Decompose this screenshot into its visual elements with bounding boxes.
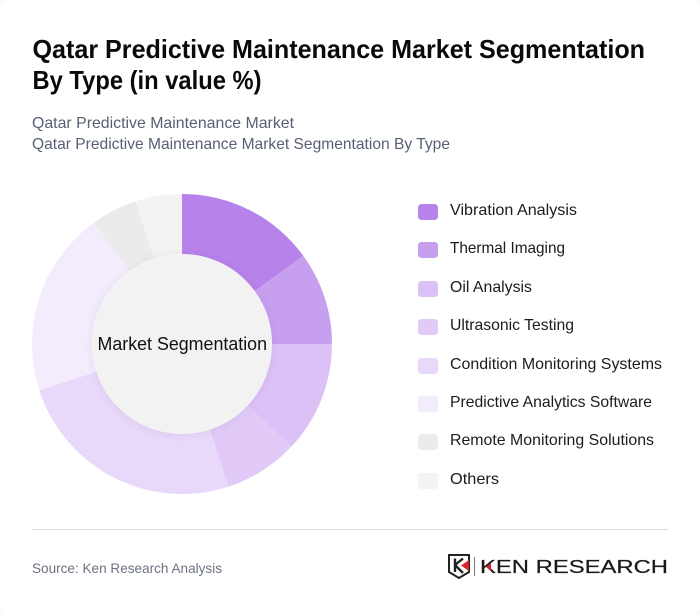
legend item: Oil Analysis bbox=[418, 279, 532, 297]
legend item: Thermal Imaging: Thermal Imaging bbox=[450, 240, 565, 257]
legend item: Ultrasonic Testing: Ultrasonic Testing bbox=[450, 317, 574, 334]
centre label: Market Segmentation bbox=[98, 334, 267, 354]
title bbox=[32, 34, 645, 95]
segment: Condition Monitoring Systems bbox=[39, 372, 228, 494]
donut chart bbox=[32, 194, 332, 494]
segment: Others bbox=[136, 194, 182, 258]
legend item: Remote Monitoring Solutions: Remote Monitoring Solutions bbox=[450, 432, 654, 449]
legend item: Vibration Analysis: Vibration Analysis bbox=[450, 202, 577, 219]
legend item: Others bbox=[418, 471, 499, 489]
donut centre bbox=[92, 254, 272, 434]
logo: Ken Research bbox=[449, 555, 668, 578]
icon: shield bbox=[449, 555, 469, 578]
segment: Ultrasonic Testing bbox=[210, 406, 291, 487]
legend bbox=[418, 202, 662, 489]
segment: Thermal Imaging bbox=[255, 256, 332, 344]
legend item: Predictive Analytics Software: Predictive Analytics Software bbox=[450, 394, 652, 411]
legend item: Condition Monitoring Systems: Condition Monitoring Systems bbox=[450, 356, 662, 373]
segment: Vibration Analysis bbox=[182, 194, 303, 291]
segment: Predictive Analytics Software bbox=[32, 223, 129, 390]
source note: Source: Ken Research Analysis bbox=[32, 560, 222, 576]
legend item: Others: Others bbox=[450, 471, 499, 488]
wordmark: KEN RESEARCH bbox=[480, 557, 668, 577]
segment: Oil Analysis bbox=[248, 344, 332, 447]
subtitle: Qatar Predictive Maintenance Market bbox=[32, 115, 295, 132]
title: Qatar Predictive Maintenance Market Segmentation bbox=[32, 34, 645, 64]
subtitle bbox=[32, 115, 450, 153]
segment: Remote Monitoring Solutions bbox=[94, 201, 154, 271]
subtitle: Qatar Predictive Maintenance Market Segmentation By Type bbox=[32, 136, 450, 153]
title: By Type (in value %) bbox=[32, 65, 262, 95]
legend item: Oil Analysis: Oil Analysis bbox=[450, 279, 532, 296]
